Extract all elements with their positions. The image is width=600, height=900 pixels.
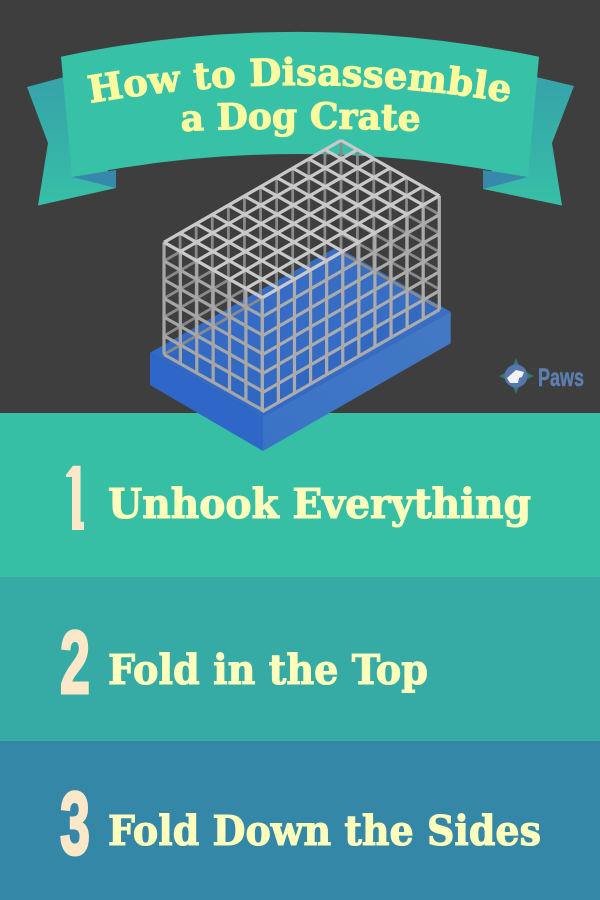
crate back walls bbox=[164, 140, 439, 354]
dark background bbox=[0, 0, 600, 413]
title ribbon bbox=[27, 32, 574, 205]
ribbon right tail bbox=[483, 77, 574, 206]
step 3 bbox=[60, 773, 541, 873]
ribbon left fold bbox=[72, 170, 116, 188]
step 3 label: Fold Down the Sides bbox=[108, 807, 541, 855]
ribbon right fold bbox=[483, 170, 528, 189]
crate base right side bbox=[263, 312, 451, 451]
title: a Dog Crate bbox=[182, 101, 420, 138]
title bbox=[86, 56, 510, 138]
step 1 bbox=[66, 466, 531, 530]
logo compass icon bbox=[499, 358, 534, 394]
step 1: 1 bbox=[62, 448, 88, 555]
step 2 bbox=[60, 612, 428, 712]
dog crate illustration bbox=[150, 140, 451, 451]
crate right front wall bbox=[262, 196, 439, 412]
ribbon main band bbox=[61, 32, 539, 177]
title line 2 bbox=[181, 128, 423, 131]
step 2 label: Fold in the Top bbox=[108, 646, 428, 694]
crate top grid bbox=[164, 140, 439, 298]
title line 1 bbox=[90, 85, 513, 103]
crate left front wall bbox=[164, 242, 262, 410]
crate floor bbox=[150, 247, 451, 417]
crate base left side bbox=[150, 353, 263, 451]
step band backgrounds bbox=[0, 413, 600, 900]
step 2 number: 2 bbox=[60, 612, 90, 712]
step 1 label: Unhook Everything bbox=[108, 480, 531, 528]
logo bbox=[499, 358, 584, 394]
ribbon left tail bbox=[27, 77, 116, 206]
step 3 number: 3 bbox=[60, 773, 90, 873]
title: How to Disassemble bbox=[86, 56, 510, 104]
